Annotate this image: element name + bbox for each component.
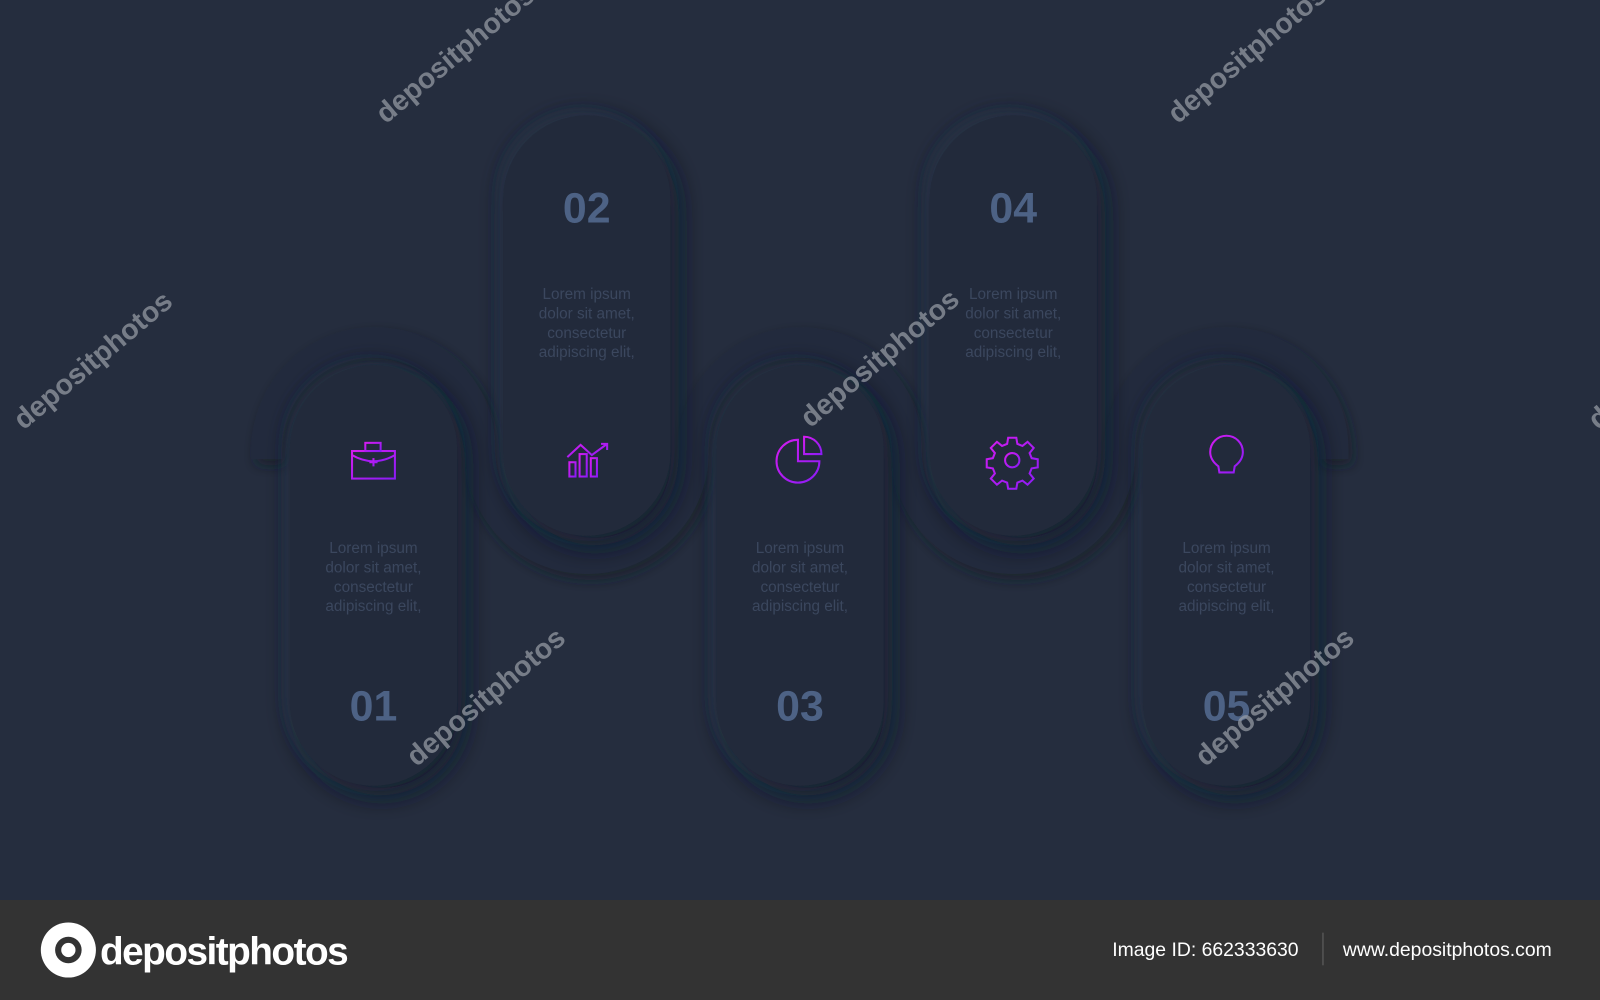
pill 03: Lorem ipsum [756, 540, 844, 557]
icon: chart [564, 444, 608, 477]
pill 05: Lorem ipsum [1182, 540, 1271, 557]
pill 01 [290, 365, 457, 786]
icon: briefcase [352, 443, 395, 479]
pill 04: consectetur [974, 325, 1053, 342]
footer bar [0, 900, 1600, 1000]
pill 05 [1143, 365, 1310, 786]
pill 05: 05 [1203, 682, 1250, 730]
pill 05: adipiscing elit, [1178, 598, 1275, 615]
pill 04: dolor sit amet, [965, 305, 1061, 322]
footer bar: www.depositphotos.com [1342, 939, 1552, 961]
footer logo: depositphotos [100, 930, 347, 973]
pill 01: 01 [350, 682, 397, 730]
watermarks: depositphotos [1189, 622, 1360, 773]
pill 02: dolor sit amet, [539, 305, 635, 322]
pill 04: 04 [989, 184, 1037, 232]
pill 03: consectetur [760, 579, 840, 596]
pill 02: consectetur [547, 325, 626, 342]
pill 01: Lorem ipsum [329, 540, 418, 557]
footer logo [41, 922, 347, 978]
pill 04: adipiscing elit, [965, 344, 1061, 361]
pill 01: dolor sit amet, [325, 559, 422, 576]
pill 05: consectetur [1187, 579, 1266, 596]
watermarks: depositphotos [400, 622, 572, 773]
pill 02 [503, 115, 670, 536]
pill 02: adipiscing elit, [539, 344, 635, 361]
icon: gear [987, 438, 1038, 489]
pill 03: dolor sit amet, [752, 559, 848, 576]
footer id: Image ID: 662333630 [1112, 939, 1299, 961]
pill 05: dolor sit amet, [1178, 559, 1275, 576]
watermarks: depositphotos [794, 283, 966, 434]
pill 02: 02 [563, 184, 611, 232]
watermarks: depositphotos [8, 285, 179, 436]
pill 03: 03 [776, 682, 824, 730]
pill 03: adipiscing elit, [752, 598, 848, 615]
pill 04 [930, 115, 1097, 536]
pill 01: adipiscing elit, [325, 598, 422, 615]
pill 03 [716, 365, 884, 786]
snake ring connector [267, 342, 1333, 559]
pill 02: Lorem ipsum [543, 286, 631, 303]
icon: bulb [1210, 436, 1243, 482]
icon: pie chart [777, 437, 821, 483]
pill 04: Lorem ipsum [969, 286, 1057, 303]
pill 01: consectetur [334, 579, 413, 596]
watermarks [8, 0, 1600, 773]
